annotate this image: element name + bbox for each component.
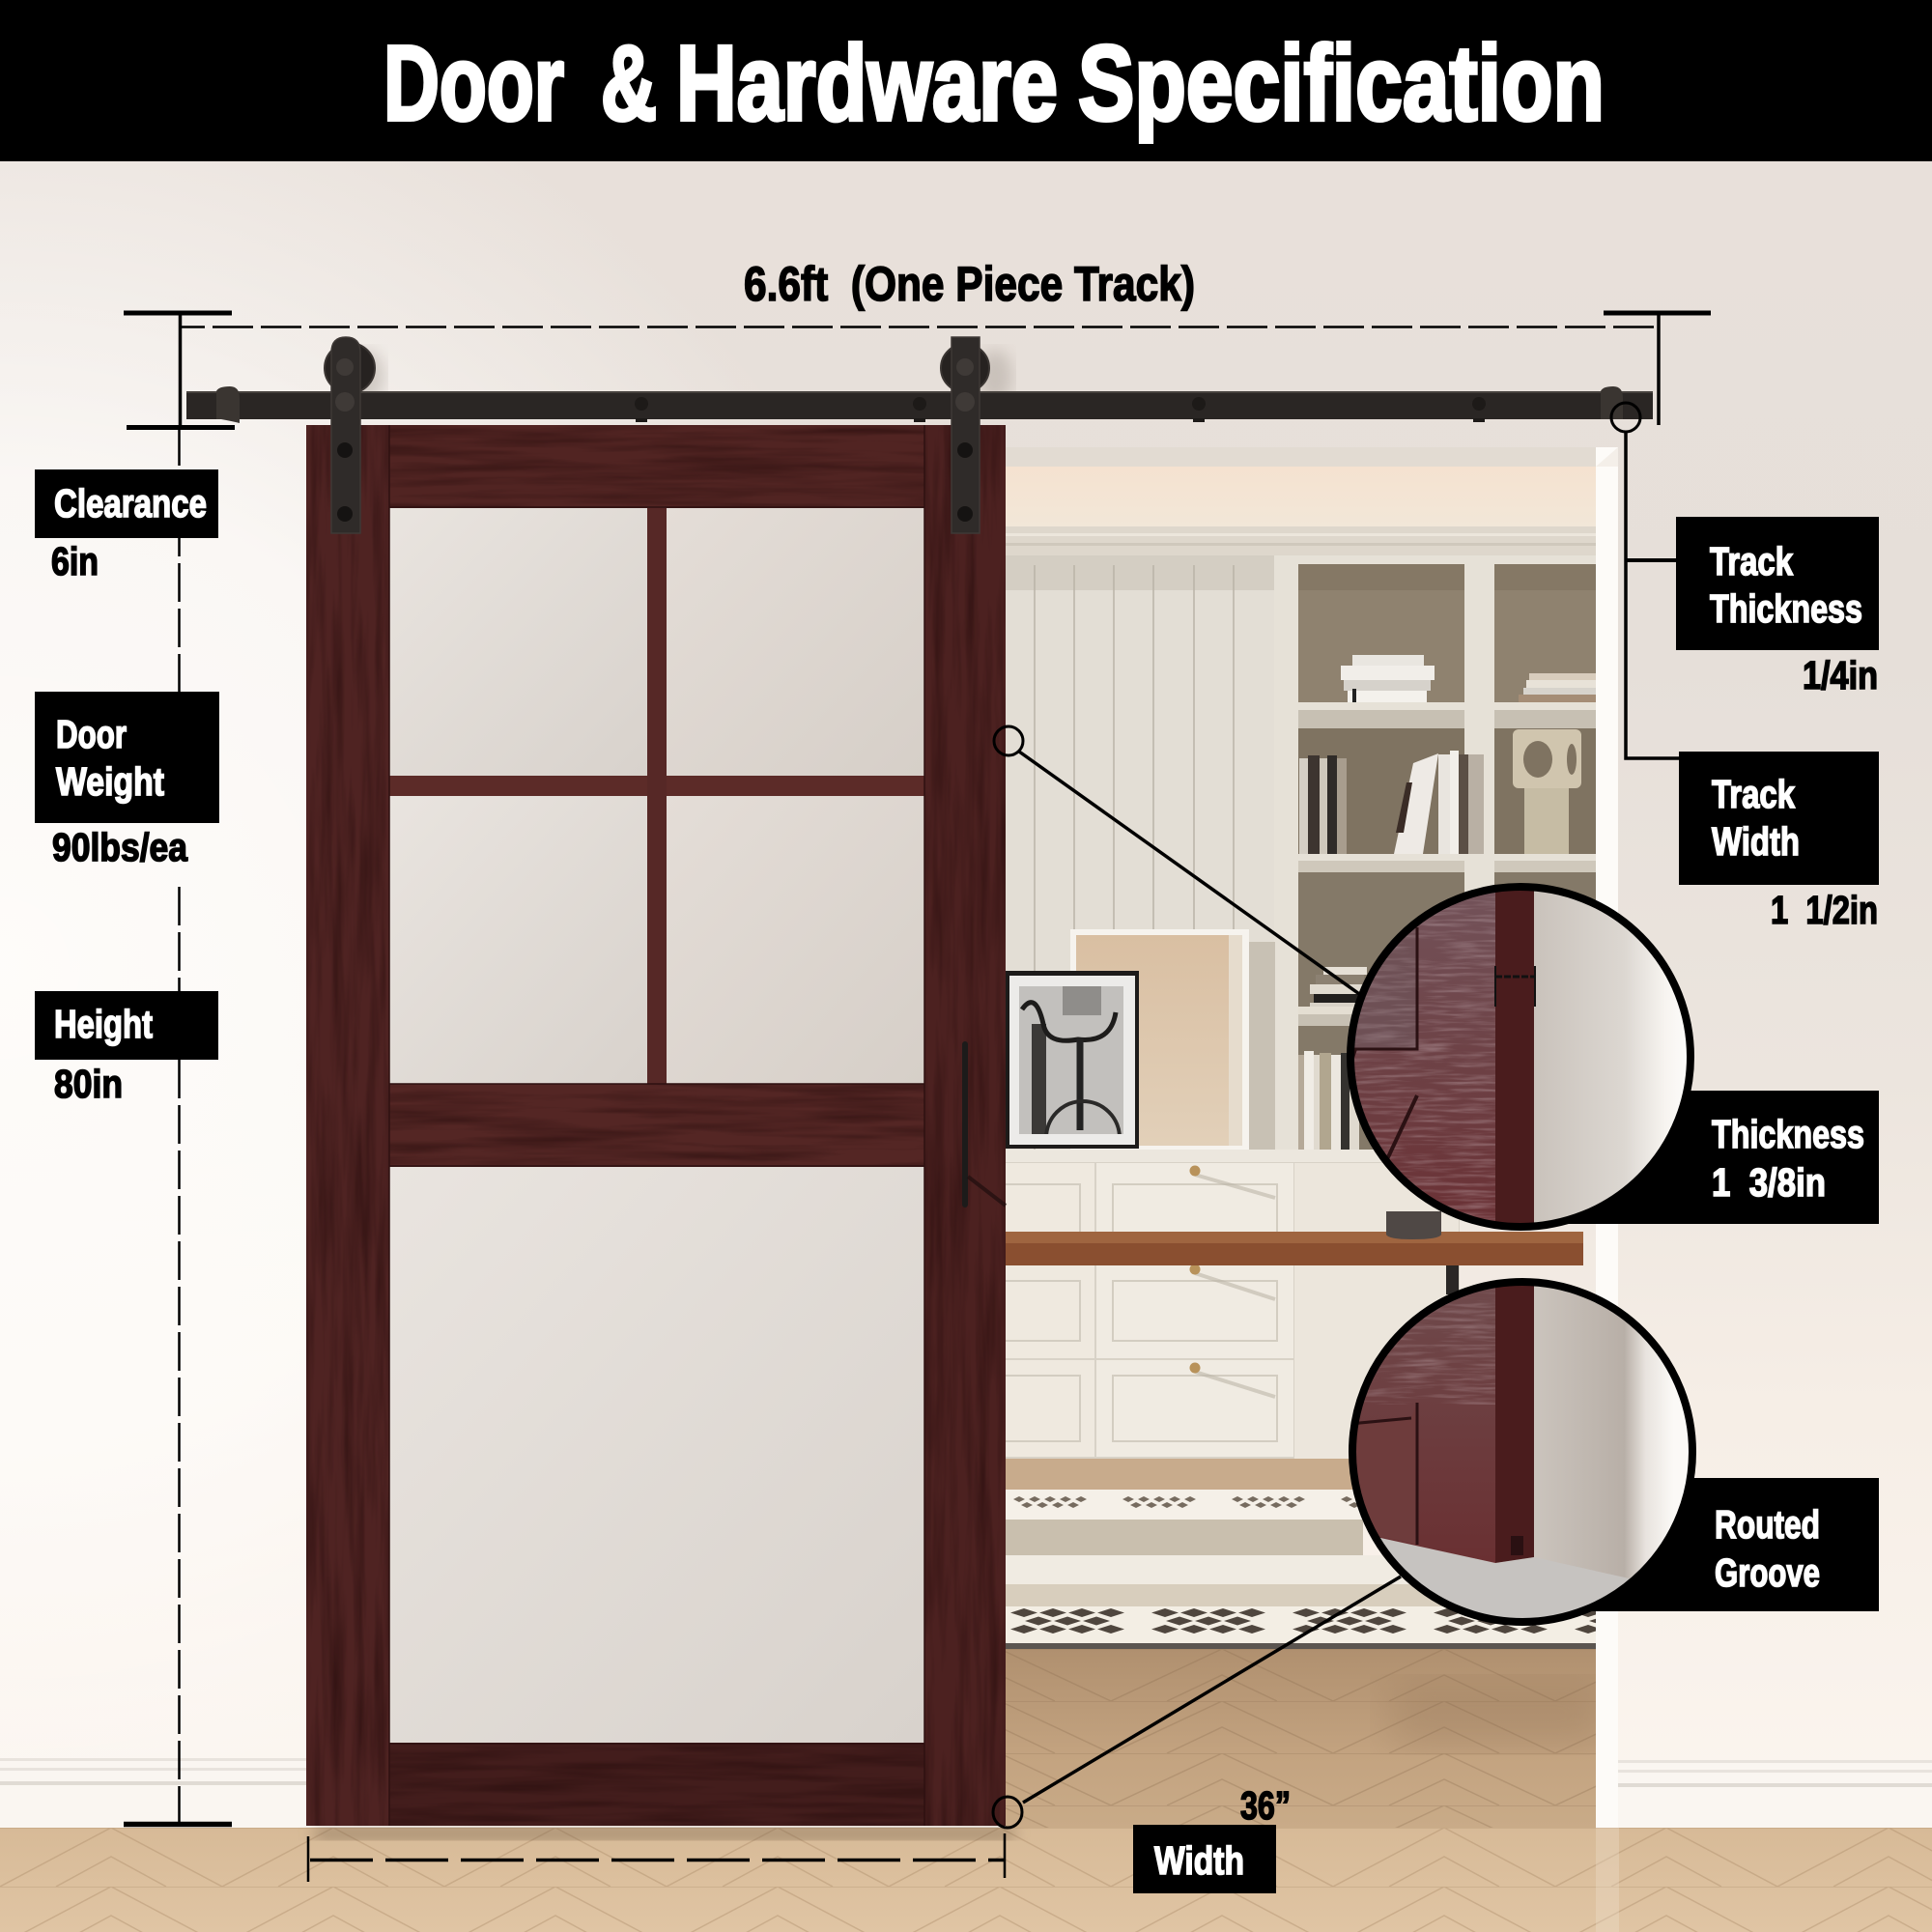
dimension: door width: [308, 1833, 1005, 1882]
label: width: [1133, 1825, 1276, 1893]
label: routed groove: Groove: [1715, 1550, 1820, 1595]
track end stop left: [216, 386, 240, 423]
title: Door: [384, 24, 564, 143]
detail circle: door thickness: [1348, 884, 1698, 1232]
label: clearance: [35, 469, 218, 538]
glass panes: [389, 508, 924, 1743]
wood rails and stiles: [306, 425, 1006, 1826]
dimension: clearance and height: [124, 313, 235, 1824]
label: thickness: [1546, 1091, 1879, 1224]
watercolor frame: [1070, 929, 1249, 1150]
bookshelf: [1274, 555, 1596, 1164]
leader: thickness detail: [994, 726, 1362, 996]
framed pictures: [1006, 929, 1275, 1150]
cup: [1386, 1211, 1441, 1239]
shelf items: magazine stack: [1519, 673, 1596, 702]
label: thickness: Thickness: [1712, 1112, 1864, 1156]
panelled wall: [1006, 555, 1281, 1150]
label: track thickness: Track: [1710, 539, 1793, 583]
hanger left: [325, 337, 375, 533]
sculpture: [1513, 729, 1581, 854]
value: height: 80in: [54, 1062, 123, 1106]
shelf items: white book stack: [1341, 655, 1435, 702]
title: Hardware: [676, 24, 1058, 143]
value: width: 36”: [1240, 1783, 1291, 1828]
title: [384, 24, 1605, 143]
interior room through door opening: [1006, 447, 1618, 1828]
label: door weight: Weight: [56, 759, 164, 804]
label: height: [35, 991, 218, 1060]
barn door track: [186, 386, 1653, 423]
label: track width: Width: [1712, 819, 1800, 864]
label: thickness: 1 3/8in: [1712, 1160, 1826, 1205]
label: width: Width: [1154, 1838, 1244, 1883]
detail circle: routed groove: [1350, 1279, 1698, 1633]
shelf items: books right: [1394, 751, 1484, 854]
hanger right: [941, 337, 989, 533]
track bolts: [635, 397, 1486, 422]
label: routed groove: Routed: [1715, 1502, 1820, 1547]
value: track thickness: 1/4in: [1803, 653, 1878, 697]
desk top: [1006, 1232, 1583, 1265]
value: door weight: 90lbs/ea: [52, 825, 188, 869]
door slab: [306, 425, 1006, 1826]
baseboard left: [0, 1758, 306, 1828]
shelf items: small stack: [1310, 967, 1367, 1007]
cabinets: [1006, 1150, 1596, 1459]
crown molding: [1006, 526, 1596, 555]
bicycle photo: [1006, 971, 1139, 1149]
label: door weight: Door: [56, 712, 127, 756]
value: clearance: 6in: [51, 539, 99, 583]
room floor and rug: [1006, 1459, 1604, 1828]
shelf items: books left: [1299, 755, 1347, 854]
title: Specification: [1078, 24, 1605, 143]
track length label: 6.6ft (One Piece Track): [744, 257, 1195, 311]
door handle: [962, 1041, 1006, 1208]
floor: [0, 1828, 1932, 1932]
hanger shadows: [346, 350, 1012, 404]
leader: track callouts: [1611, 403, 1679, 758]
label: track width: [1679, 752, 1879, 885]
value: track width: 1 1/2in: [1771, 888, 1878, 932]
label: height: Height: [54, 1002, 153, 1046]
header bar: [0, 0, 1932, 161]
frame shadow on panel: [1249, 942, 1275, 1150]
track end stop right: [1601, 386, 1623, 419]
label: door weight: [35, 692, 219, 823]
label: track width: Track: [1712, 772, 1795, 816]
baseboard right: [1618, 1760, 1932, 1828]
label: track thickness: Thickness: [1710, 586, 1862, 631]
label: clearance: Clearance: [54, 481, 207, 526]
label: routed groove: [1546, 1478, 1879, 1611]
leader: routed groove detail: [993, 1577, 1401, 1828]
title: &: [601, 24, 657, 143]
door frame trim: [1006, 447, 1618, 1828]
sliding barn door: [306, 425, 1006, 1826]
shelf items: lower books: [1298, 1051, 1359, 1150]
label: track thickness: [1676, 517, 1879, 650]
ceiling glow: [1006, 467, 1596, 526]
